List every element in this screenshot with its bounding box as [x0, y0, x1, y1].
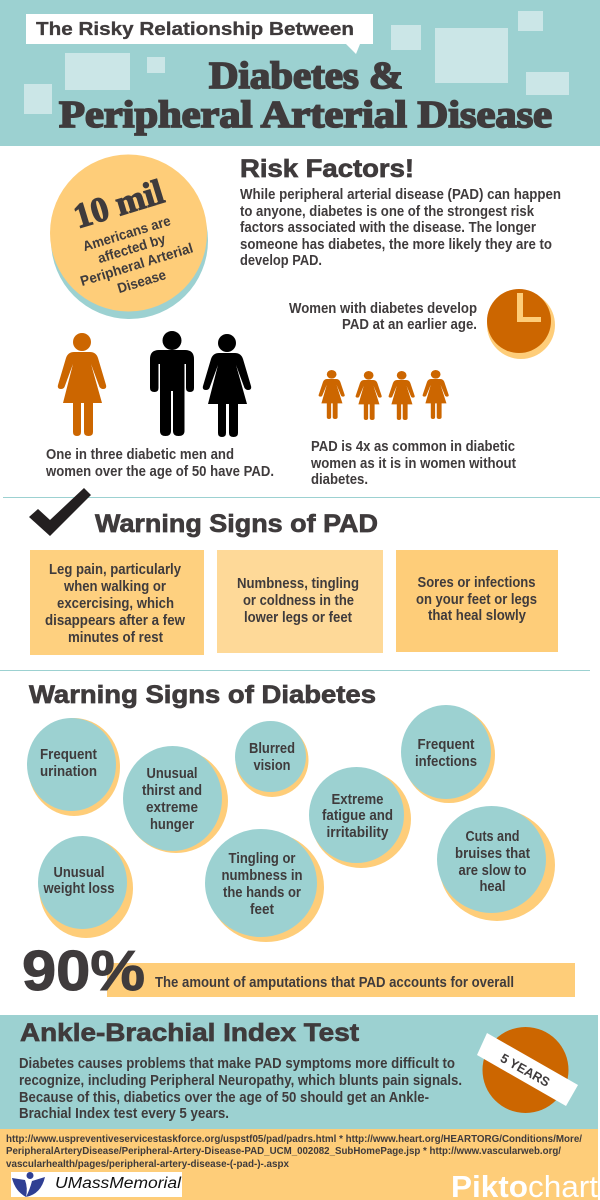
- bubble: fatigue: Extreme: [332, 792, 384, 808]
- women earlier age text: PAD at an earlier age.: [342, 317, 477, 333]
- icon: clock: [487, 289, 555, 359]
- bubble: frequent urination: Frequent: [40, 747, 97, 763]
- bubble: thirst and hunger: thirst and: [142, 783, 202, 799]
- bubble: tingling: [205, 829, 324, 942]
- heading: ankle-brachial index test: Ankle-Brachial Index Test: [20, 1019, 360, 1047]
- stat circle: 10 million: Disease: [115, 266, 168, 296]
- card: numbness: or coldness in the: [243, 593, 354, 609]
- bubble: thirst and hunger: hunger: [150, 817, 194, 833]
- bubble: fatigue: irritability: [326, 825, 388, 841]
- bubble: tingling: Tingling or: [228, 851, 296, 867]
- one in three text: One in three diabetic men and: [46, 447, 234, 463]
- speech bubble subtitle: [26, 14, 373, 54]
- one in three text: [45, 447, 274, 480]
- bubble: blurred vision: Blurred: [249, 741, 295, 757]
- heading: warning signs of diabetes: Warning Signs of Diabetes: [29, 681, 376, 709]
- stat: 90 percent amputations: 90%: [22, 939, 145, 1003]
- icon: four orange women: [319, 370, 449, 420]
- heading: warning signs of PAD: Warning Signs of PAD: [95, 510, 378, 538]
- source links: PeripheralArteryDisease/Peripheral-Artery-Disease-PAD_UCM_002082_SubHomePage.jsp * http://www.vascularweb.org/: [6, 1145, 561, 1157]
- source links: [6, 1133, 582, 1170]
- icon: check mark: [29, 488, 91, 536]
- card: numbness: Numbness, tingling: [237, 576, 359, 592]
- title: [59, 55, 552, 136]
- 4x as common text: PAD is 4x as common in diabetic: [311, 439, 515, 455]
- women earlier age text: Women with diabetes develop: [289, 301, 477, 317]
- ankle-brachial paragraph: Brachial Index test every 5 years.: [19, 1106, 229, 1122]
- stat circle: 10 million: Americans are: [81, 212, 173, 254]
- card: sores: [396, 550, 558, 652]
- bubble: cuts and bruises: [437, 806, 555, 921]
- stat circle: 10 million: [50, 154, 208, 319]
- risk factors paragraph: [240, 187, 561, 269]
- 4x as common text: [310, 439, 516, 488]
- stat circle: 10 million: 10 mil: [69, 172, 169, 236]
- source links: vascularhealth/pages/peripheral-artery-disease-(-pad-)-.aspx: [6, 1158, 289, 1170]
- title: Diabetes &: [209, 55, 403, 97]
- icon: orange woman: [58, 333, 106, 436]
- bubble: thirst and hunger: Unusual: [146, 766, 198, 782]
- panel: ankle-brachial index test: [0, 1015, 598, 1129]
- ankle-brachial paragraph: Because of this, diabetics over the age of 50 should get an Ankle-: [19, 1090, 429, 1106]
- bubble: weight loss: [38, 836, 133, 938]
- stat circle: 10 million: affected by: [96, 230, 168, 266]
- bubble: tingling: the hands or: [223, 885, 301, 901]
- bubble: blurred vision: [235, 721, 308, 797]
- logo: UMass Memorial: UMassMemorial: [55, 1175, 182, 1192]
- bubble: cuts and bruises: heal: [480, 879, 506, 895]
- stat: 90 percent amputations: The amount of amputations that PAD accounts for overall: [155, 975, 514, 991]
- bubble: cuts and bruises: bruises that: [455, 846, 530, 862]
- risk factors paragraph: factors associated with the disease. The longer: [240, 220, 536, 236]
- women earlier age text: [289, 301, 477, 333]
- stat: 90 percent amputations: [22, 939, 575, 1003]
- bubble: frequent infections: [401, 705, 495, 803]
- speech bubble subtitle: The Risky Relationship Between: [36, 18, 354, 39]
- bubble: tingling: numbness in: [222, 868, 302, 884]
- 4x as common text: diabetes.: [311, 472, 368, 488]
- header banner: [0, 0, 600, 146]
- heading: risk factors: Risk Factors!: [240, 155, 414, 183]
- card: leg pain: disappears after a few: [45, 613, 186, 629]
- card: leg pain: excercising, which: [57, 596, 174, 612]
- bubble: fatigue: fatigue and: [322, 808, 393, 824]
- bubble: tingling: feet: [250, 902, 274, 918]
- bubble: thirst and hunger: [123, 746, 228, 853]
- risk factors paragraph: While peripheral arterial disease (PAD) can happen: [240, 187, 561, 203]
- bubble: cuts and bruises: Cuts and: [466, 829, 520, 845]
- bubble: weight loss: Unusual: [54, 865, 104, 881]
- ankle-brachial paragraph: recognize, including Peripheral Neuropathy, which blunts pain signals.: [19, 1073, 462, 1089]
- icon: 5 years badge: [477, 1027, 578, 1113]
- card: leg pain: [30, 550, 204, 655]
- bubble: thirst and hunger: extreme: [146, 800, 198, 816]
- ankle-brachial paragraph: Diabetes causes problems that make PAD symptoms more difficult to: [19, 1056, 455, 1072]
- bubble: frequent infections: infections: [415, 754, 477, 770]
- bubble: fatigue: [309, 767, 411, 868]
- card: sores: on your feet or legs: [416, 592, 537, 608]
- ankle-brachial paragraph: [19, 1056, 462, 1122]
- card: numbness: [217, 550, 383, 653]
- logo: UMass Memorial: [11, 1172, 182, 1197]
- stat circle: 10 million: Peripheral Arterial: [78, 239, 195, 289]
- title: Peripheral Arterial Disease: [59, 94, 552, 136]
- bubble: frequent urination: [27, 718, 120, 816]
- card: leg pain: minutes of rest: [68, 630, 163, 646]
- risk factors paragraph: develop PAD.: [240, 253, 322, 269]
- risk factors paragraph: someone has diabetes, the more likely they are to: [240, 237, 552, 253]
- risk factors paragraph: to anyone, diabetes is one of the strongest risk: [240, 204, 535, 220]
- card: leg pain: when walking or: [63, 579, 166, 595]
- card: numbness: lower legs or feet: [244, 610, 352, 626]
- icon: 5 years badge: 5 YEARS: [498, 1050, 553, 1090]
- card: sores: Sores or infections: [418, 575, 536, 591]
- card: leg pain: Leg pain, particularly: [49, 562, 181, 578]
- bubble: weight loss: weight loss: [43, 881, 115, 897]
- icon: black woman: [203, 334, 251, 437]
- bubble: blurred vision: vision: [254, 758, 290, 774]
- panel: footer sources: [0, 1129, 598, 1200]
- 4x as common text: women as it is in women without: [310, 456, 516, 472]
- bubble: cuts and bruises: are slow to: [458, 863, 527, 879]
- one in three text: women over the age of 50 have PAD.: [45, 464, 274, 480]
- icon: black man: [150, 331, 194, 436]
- bubble: frequent infections: Frequent: [418, 737, 475, 753]
- bubble: frequent urination: urination: [40, 764, 97, 780]
- card: sores: that heal slowly: [428, 608, 526, 624]
